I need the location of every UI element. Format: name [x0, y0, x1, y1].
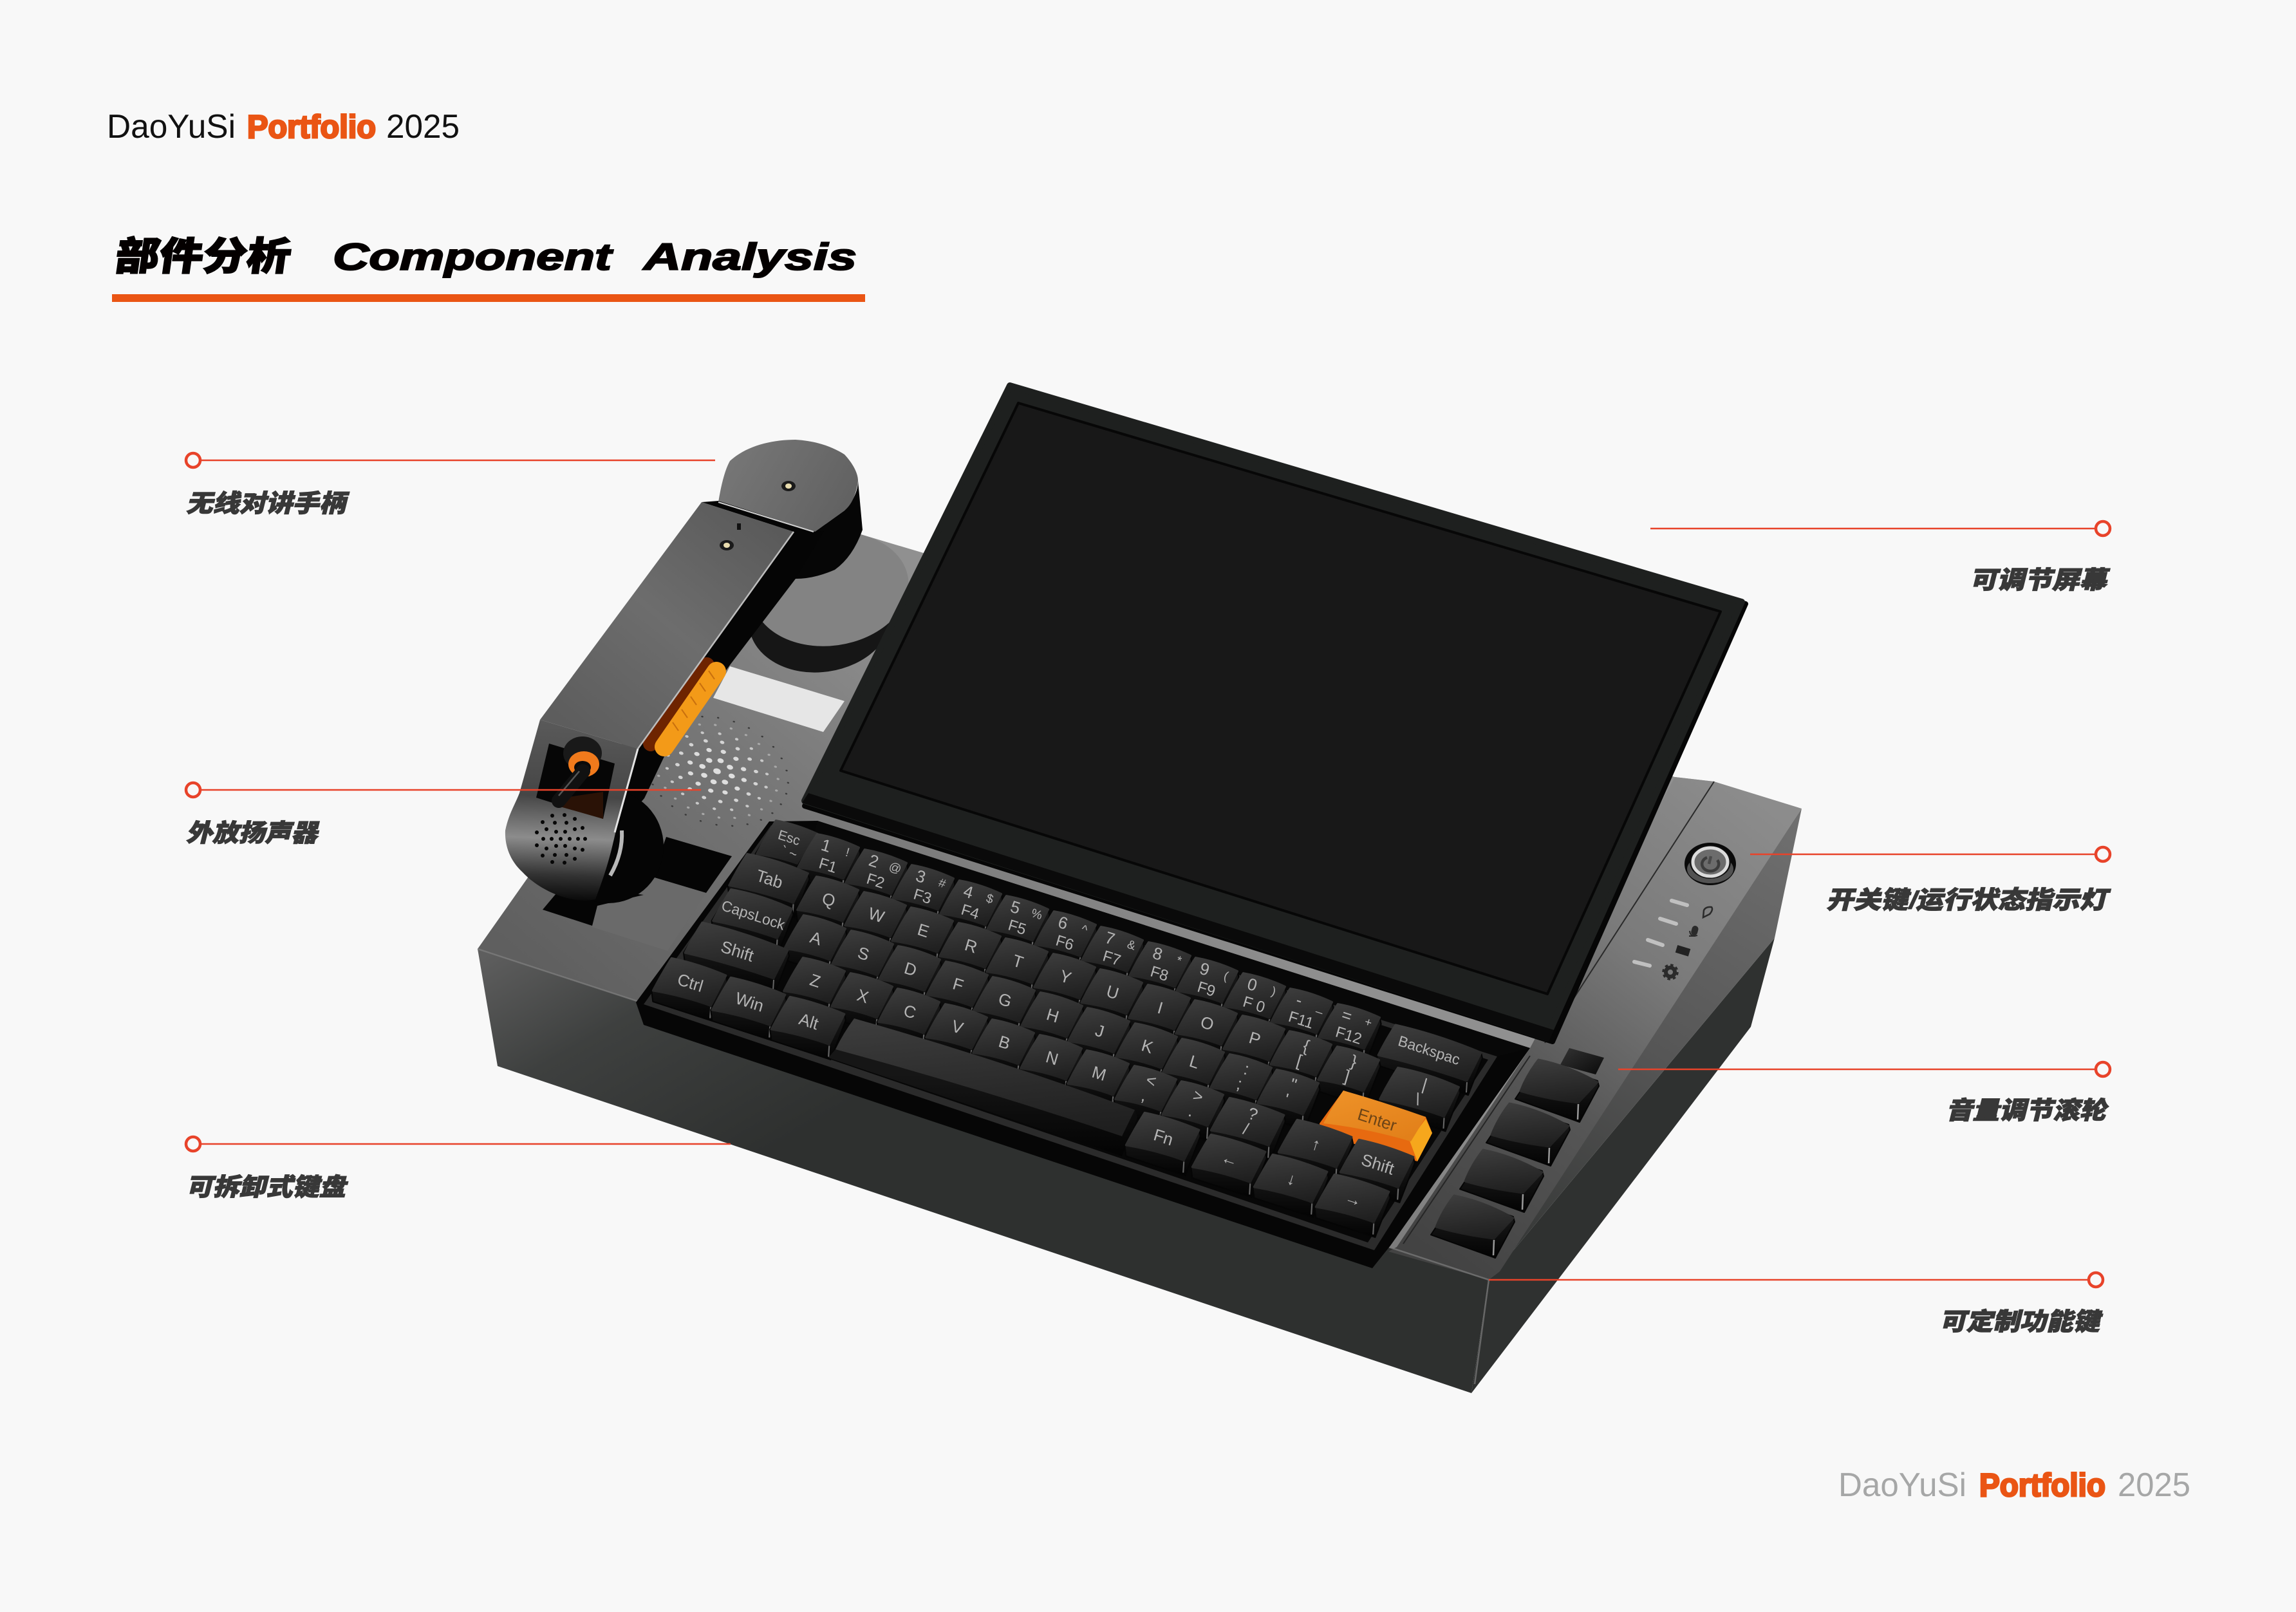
header brand line: DaoYuSi — [107, 108, 236, 145]
number row: ^ — [1079, 923, 1089, 937]
number row: 5 — [1008, 897, 1023, 918]
number row: F8 — [1148, 962, 1170, 985]
label: adjustable screen: 可调节屏幕 — [1968, 567, 2112, 594]
wireless handset — [505, 440, 863, 903]
device illustration — [478, 386, 1802, 1393]
screen shadow edge — [805, 387, 1746, 1042]
screen bezel — [805, 386, 1742, 1038]
QWERTY row — [728, 854, 1460, 1131]
mouthpiece front — [505, 720, 638, 901]
label: detachable keyboard: 可拆卸式键盘 — [185, 1174, 351, 1201]
QWERTY row: [ — [1294, 1051, 1305, 1071]
ASDF row: D — [902, 958, 919, 980]
QWERTY row: { — [1301, 1036, 1312, 1056]
screen display — [841, 403, 1721, 994]
footer brand line: DaoYuSi — [1838, 1467, 1966, 1504]
bottom row: Ctrl — [675, 970, 705, 996]
ZXCV row: < — [1144, 1070, 1159, 1091]
microphone holes — [535, 813, 587, 865]
ASDF row: ; — [1235, 1074, 1244, 1094]
number row: = — [1339, 1005, 1354, 1026]
bottom row: → — [1343, 1187, 1364, 1211]
footer brand line — [1838, 1467, 2190, 1504]
ASDF row: : — [1242, 1059, 1251, 1079]
volume scroll wheel — [1560, 1048, 1604, 1074]
number row: @ — [887, 860, 903, 877]
number row: F7 — [1101, 947, 1123, 970]
title: Analysis — [642, 236, 857, 278]
ZXCV row: . — [1186, 1101, 1196, 1121]
number row: F3 — [911, 885, 933, 908]
speaker grille — [631, 699, 803, 843]
title underline — [112, 294, 865, 302]
number row: 2 — [866, 850, 881, 872]
number row: F5 — [1006, 916, 1028, 939]
callout marker: adjustable screen — [1650, 521, 2110, 536]
ZXCV row: C — [901, 1000, 919, 1023]
bottom row: Win — [733, 988, 766, 1016]
QWERTY row: \ — [1413, 1089, 1423, 1109]
custom key channel — [1403, 1056, 1530, 1244]
number row: F12 — [1334, 1023, 1364, 1048]
handset base disc — [742, 522, 916, 682]
device front face — [478, 949, 1489, 1393]
QWERTY row: T — [1011, 950, 1025, 972]
ZXCV row: / — [1241, 1119, 1251, 1139]
bottom row — [651, 958, 1390, 1237]
header brand line: Portfolio — [247, 109, 376, 145]
handset pad black recess — [543, 885, 644, 926]
customizable function keys — [1431, 1060, 1599, 1258]
seam band — [702, 501, 815, 532]
number row: F 0 — [1241, 993, 1267, 1017]
orange side grip shadow — [651, 665, 707, 744]
keyboard — [651, 821, 1482, 1237]
title: 部件分析 — [113, 234, 294, 278]
number row: 0 — [1245, 974, 1260, 995]
bottom row: Fn — [1152, 1125, 1175, 1149]
ASDF row: F — [951, 973, 966, 995]
speaker label strip — [713, 666, 845, 732]
device right dark face — [1471, 938, 1775, 1393]
number row: - — [1294, 990, 1305, 1010]
callout marker: power key — [1750, 847, 2110, 861]
ZXCV row: N — [1043, 1047, 1061, 1069]
panel seam line — [1545, 782, 1714, 1043]
header brand line — [107, 108, 460, 145]
orange enter key: Enter — [1356, 1104, 1399, 1135]
device top face — [478, 512, 1714, 1280]
number row — [756, 821, 1482, 1095]
ZXCV row: ↑ — [1309, 1134, 1323, 1155]
status indicator lights — [1634, 901, 1687, 966]
ASDF row: " — [1288, 1074, 1299, 1094]
number row: F11 — [1287, 1008, 1316, 1033]
number row: F9 — [1195, 978, 1217, 1000]
orange enter key — [1320, 1091, 1432, 1161]
callout marker: speaker — [186, 783, 701, 797]
header brand line: 2025 — [386, 108, 460, 145]
QWERTY row: W — [866, 903, 887, 927]
ASDF row: CapsLock — [720, 897, 787, 933]
ZXCV row: Shift — [719, 937, 756, 966]
ZXCV row: V — [949, 1016, 966, 1038]
number row: 7 — [1103, 928, 1117, 949]
number row: Esc — [776, 827, 802, 848]
QWERTY row: O — [1199, 1012, 1216, 1035]
orange side grip — [664, 671, 716, 747]
status icons — [1663, 907, 1712, 979]
control strip — [1388, 777, 1802, 1280]
QWERTY row: Y — [1058, 966, 1074, 988]
number row: Backspac — [1396, 1032, 1462, 1068]
number row: ( — [1222, 970, 1230, 984]
QWERTY row: | — [1420, 1074, 1430, 1094]
callout lines and markers — [186, 453, 2110, 1287]
number row: ` ~ — [779, 843, 799, 863]
handset slot recess — [652, 837, 732, 893]
label: function keys: 可定制功能键 — [1938, 1309, 2105, 1336]
number row: F1 — [817, 854, 839, 877]
ASDF row: K — [1139, 1035, 1156, 1058]
ASDF row: H — [1044, 1004, 1061, 1027]
label: speaker: 外放扬声器 — [185, 820, 323, 847]
footer brand line: 2025 — [2118, 1467, 2190, 1504]
callout marker: volume wheel — [1618, 1062, 2110, 1076]
number row: F4 — [959, 901, 981, 923]
arm black side — [616, 531, 824, 830]
QWERTY row: Tab — [754, 865, 785, 892]
keyboard well — [636, 821, 1530, 1268]
number row: F6 — [1054, 932, 1076, 954]
callout marker: function keys — [1489, 1273, 2103, 1287]
ZXCV row — [684, 923, 1415, 1203]
number row: ! — [844, 846, 851, 860]
title — [113, 234, 857, 278]
number row: 9 — [1197, 959, 1212, 980]
QWERTY row: Q — [820, 888, 837, 911]
ASDF row: J — [1093, 1020, 1106, 1042]
number row: * — [1175, 953, 1184, 968]
ASDF row: L — [1187, 1051, 1202, 1073]
number row: _ — [1315, 1000, 1326, 1015]
number row: 1 — [819, 835, 834, 856]
keyboard key bed — [655, 830, 1488, 1242]
ZXCV row: X — [855, 985, 871, 1007]
bottom row: ↓ — [1285, 1168, 1298, 1190]
ZXCV row: Z — [808, 970, 823, 991]
title: Component — [333, 236, 614, 278]
number row: 6 — [1056, 912, 1070, 933]
ASDF row: S — [855, 942, 872, 964]
device right chamfer face — [1489, 809, 1802, 1280]
QWERTY row: } — [1349, 1051, 1359, 1071]
QWERTY row: I — [1155, 998, 1165, 1018]
hinge body — [553, 790, 664, 903]
number row: + — [1363, 1015, 1374, 1031]
label: power key and status lights: 开关键/运行状态指示灯 — [1825, 886, 2113, 914]
callout marker: detachable keyboard — [186, 1137, 731, 1151]
ZXCV row: , — [1139, 1085, 1149, 1105]
bottom row: Alt — [797, 1009, 821, 1034]
QWERTY row: ] — [1342, 1066, 1352, 1086]
ASDF row: G — [996, 989, 1014, 1011]
front edge highlight — [478, 949, 1489, 1384]
ASDF row: ' — [1282, 1089, 1291, 1109]
number row: ) — [1270, 985, 1277, 999]
handset pad — [592, 877, 706, 951]
connector window — [536, 744, 615, 819]
label: volume wheel: 音量调节滚轮 — [1945, 1098, 2111, 1125]
keyboard well top band — [812, 821, 1530, 1056]
bottom row: ← — [1219, 1147, 1240, 1171]
QWERTY row: U — [1104, 981, 1121, 1004]
footer brand line: Portfolio — [1979, 1467, 2105, 1503]
ZXCV row: ? — [1246, 1103, 1260, 1125]
label: wireless handset: 无线对讲手柄 — [185, 491, 351, 518]
QWERTY row: R — [962, 935, 980, 957]
screws — [781, 481, 796, 491]
number row: % — [1030, 906, 1044, 923]
callout marker: wireless handset — [186, 453, 715, 467]
arm top — [540, 502, 794, 749]
earpiece underside — [772, 481, 863, 579]
number row: 4 — [961, 881, 976, 903]
ZXCV row: M — [1090, 1062, 1108, 1085]
ZXCV row: > — [1191, 1085, 1206, 1107]
screen bottom shade — [802, 793, 1554, 1042]
QWERTY row: E — [915, 919, 931, 941]
QWERTY row: P — [1247, 1027, 1263, 1049]
orange port — [559, 736, 602, 801]
ASDF row — [712, 889, 1320, 1130]
number row: F2 — [864, 870, 886, 892]
earpiece top — [718, 440, 858, 532]
ZXCV row: B — [996, 1031, 1013, 1053]
number row: 3 — [913, 866, 928, 887]
number row: & — [1126, 938, 1137, 953]
ASDF row: A — [808, 927, 825, 950]
ZXCV row: Shift — [1359, 1150, 1397, 1179]
screen — [802, 386, 1746, 1042]
number row: # — [937, 876, 947, 892]
keyboard plate — [644, 825, 1497, 1250]
power button — [1685, 843, 1736, 885]
number row: 8 — [1150, 943, 1165, 964]
number row: $ — [985, 892, 995, 907]
